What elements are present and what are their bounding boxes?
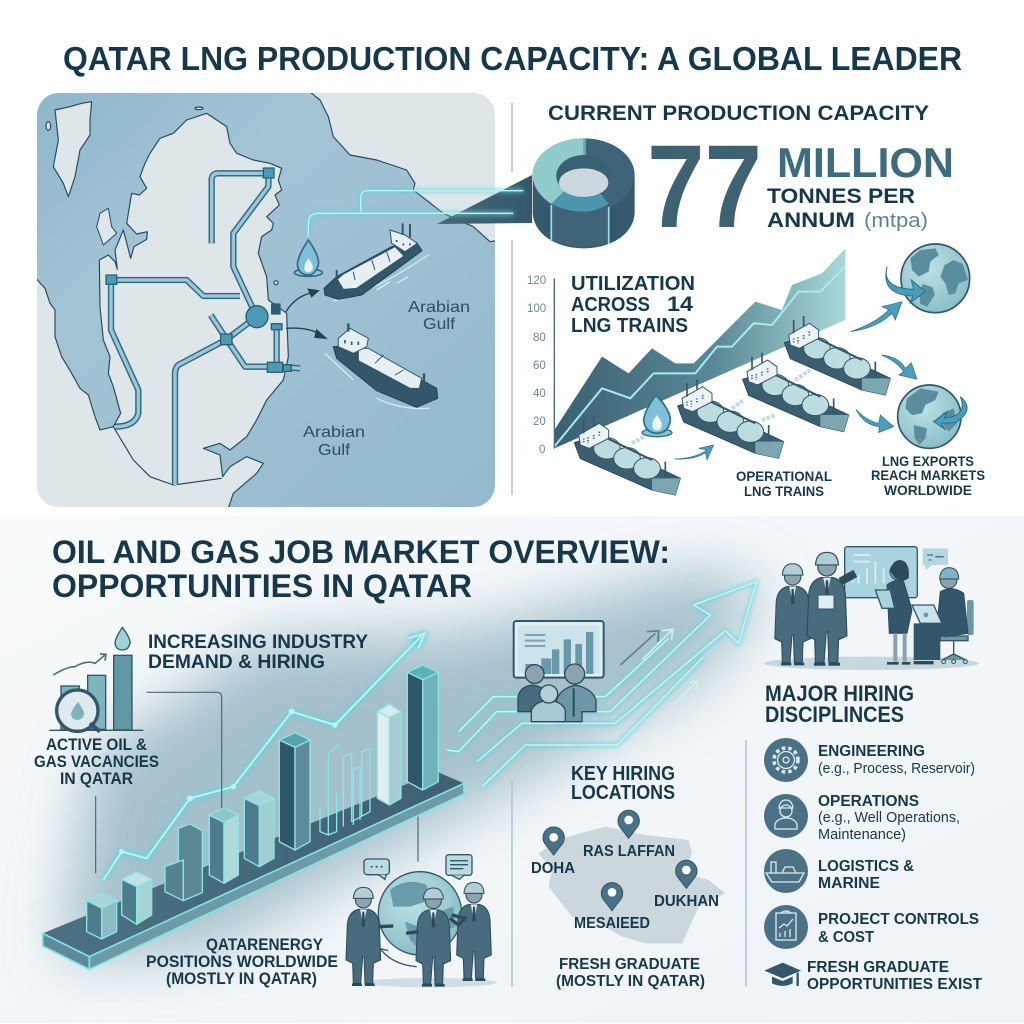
label: active vacancies: GAS VACANCIES <box>34 753 159 771</box>
location names: RAS LAFFAN <box>583 843 675 860</box>
leader lines <box>96 692 418 873</box>
discipline: engineering: (e.g., Process, Reservoir) <box>818 761 975 777</box>
label: QatarEnergy positions: QATARENERGY <box>206 936 323 954</box>
label: increasing demand <box>148 632 368 673</box>
discipline: project controls <box>764 905 979 949</box>
label: fresh graduate: (MOSTLY IN QATAR) <box>556 973 705 990</box>
icon: clipboard chart <box>764 905 808 949</box>
discipline: operations: OPERATIONS <box>818 793 919 810</box>
big number: 77 <box>647 121 762 253</box>
label: QatarEnergy positions: (MOSTLY IN QATAR) <box>166 970 317 988</box>
y axis labels: 80 <box>533 332 546 344</box>
label: increasing demand: INCREASING INDUSTRY <box>148 632 368 653</box>
label: Arabian Gulf: Gulf <box>423 316 456 333</box>
discipline: logistics <box>764 849 914 893</box>
discipline: fresh graduate <box>764 959 982 993</box>
location names: DOHA <box>531 860 575 877</box>
y axis labels: 20 <box>533 416 546 428</box>
label: Arabian Gulf lower: Gulf <box>318 442 351 459</box>
label: LNG exports: REACH MARKETS <box>871 467 985 483</box>
label: fresh graduate <box>556 956 705 990</box>
label: active vacancies: ACTIVE OIL & <box>46 736 147 754</box>
LNG trains ships <box>574 316 890 495</box>
icon: active vacancies <box>49 627 143 732</box>
y axis labels: 100 <box>527 303 546 315</box>
map: hiring locations <box>531 810 725 943</box>
platform <box>43 772 464 969</box>
heading: key hiring locations <box>571 763 675 804</box>
icon: worker <box>764 794 808 838</box>
heading: key hiring locations: LOCATIONS <box>571 782 675 804</box>
unit text: MILLION <box>777 139 954 186</box>
discipline: operations: Maintenance) <box>818 827 906 843</box>
pins <box>543 810 697 911</box>
heading: key hiring locations: KEY HIRING <box>571 763 675 785</box>
y axis labels: 120 <box>527 275 546 287</box>
map geography <box>30 87 500 513</box>
label: Arabian Gulf lower: Arabian <box>303 424 365 441</box>
illustration: QatarEnergy globe team <box>346 855 497 987</box>
globe: upper <box>886 244 970 313</box>
heading: major hiring disciplines: DISCIPLINCES <box>765 702 904 727</box>
callout pointer to capacity ring <box>437 175 532 224</box>
chart heading: UTILIZATION <box>571 273 695 295</box>
globe: lower <box>898 385 967 448</box>
label: Arabian Gulf: Arabian <box>408 299 470 316</box>
heading: job market: OPPORTUNITIES IN QATAR <box>52 568 472 604</box>
discipline: operations <box>764 793 960 843</box>
chart heading: 14 <box>667 293 693 316</box>
discipline: fresh graduate: OPPORTUNITIES EXIST <box>807 976 982 993</box>
y axis labels <box>527 275 546 456</box>
label: LNG exports: LNG EXPORTS <box>882 453 974 469</box>
illustration: team at presentation board <box>764 547 979 670</box>
location names: DUKHAN <box>654 893 719 910</box>
icon: gear <box>764 738 808 782</box>
heading: major hiring disciplines <box>765 681 914 727</box>
icon: presentation screen with audience <box>514 621 604 722</box>
glowing connector lines <box>308 191 523 237</box>
discipline: logistics: MARINE <box>818 875 880 892</box>
discipline: project controls: & COST <box>818 929 874 946</box>
arrows: from terminal to ships <box>286 289 326 338</box>
location names <box>531 843 719 932</box>
label: LNG exports: WORLDWIDE <box>884 482 972 498</box>
heading: current production capacity: CURRENT PRODUCTION CAPACITY <box>548 102 929 125</box>
chart heading: LNG TRAINS <box>571 315 688 337</box>
y axis labels: 60 <box>533 360 546 372</box>
ship: map upper tanker <box>324 223 428 301</box>
label: operational LNG trains <box>736 468 832 499</box>
panel: job market background <box>0 516 1024 1023</box>
pipelines <box>106 168 300 485</box>
discipline: engineering <box>764 738 975 782</box>
label: fresh graduate: FRESH GRADUATE <box>559 956 700 973</box>
unit text: TONNES PER <box>767 185 915 208</box>
label: QatarEnergy positions: POSITIONS WORLDWIDE <box>146 953 338 971</box>
icon: graduation cap <box>764 963 801 986</box>
icon: flame on map <box>294 240 322 276</box>
label: operational LNG trains: OPERATIONAL <box>736 468 832 484</box>
icon: flame over chart <box>642 395 672 437</box>
y axis labels: 40 <box>533 388 546 400</box>
bars <box>87 665 438 939</box>
label: increasing demand: DEMAND & HIRING <box>148 652 325 673</box>
heading: job market: OIL AND GAS JOB MARKET OVERVIEW: <box>52 534 670 570</box>
label: active vacancies <box>34 736 159 788</box>
heading: job market <box>52 534 670 604</box>
arrows: trains to markets <box>675 302 917 460</box>
location names: MESAIEED <box>574 915 650 932</box>
discipline: logistics: LOGISTICS & <box>818 858 914 875</box>
label: LNG exports <box>871 453 985 498</box>
icon: capacity ring <box>533 138 635 248</box>
area and line <box>554 248 845 448</box>
glow behind growth chart <box>60 570 770 960</box>
icon: cargo ship <box>764 849 808 893</box>
chart heading <box>571 273 695 337</box>
label: operational LNG trains: LNG TRAINS <box>744 483 824 499</box>
big growth arrow with glowing lines <box>447 582 756 787</box>
label: active vacancies: IN QATAR <box>60 770 133 788</box>
panel: map of Qatar <box>30 87 500 513</box>
y axis labels: 0 <box>539 444 545 456</box>
growth line with arrow <box>103 633 425 880</box>
discipline: project controls: PROJECT CONTROLS <box>818 911 979 928</box>
title: QATAR LNG PRODUCTION CAPACITY: A GLOBAL LEADER <box>63 40 962 77</box>
discipline: operations: (e.g., Well Operations, <box>818 810 960 826</box>
discipline: engineering: ENGINEERING <box>818 743 925 760</box>
discipline: fresh graduate: FRESH GRADUATE <box>807 959 949 976</box>
divider <box>511 103 513 495</box>
label: Arabian Gulf lower <box>303 424 365 459</box>
unit text: ANNUM <box>767 209 855 232</box>
divider lines <box>512 740 746 987</box>
ship: map lower tanker <box>325 323 438 409</box>
unit text: (mtpa) <box>864 210 928 232</box>
unit text <box>767 139 954 232</box>
label: QatarEnergy positions <box>146 936 338 988</box>
chart: rising 3D bars <box>43 633 464 969</box>
chart: utilization across LNG trains <box>527 248 845 456</box>
chart heading: ACROSS <box>571 294 650 316</box>
label: Arabian Gulf <box>408 299 470 333</box>
heading: major hiring disciplines: MAJOR HIRING <box>765 681 914 706</box>
